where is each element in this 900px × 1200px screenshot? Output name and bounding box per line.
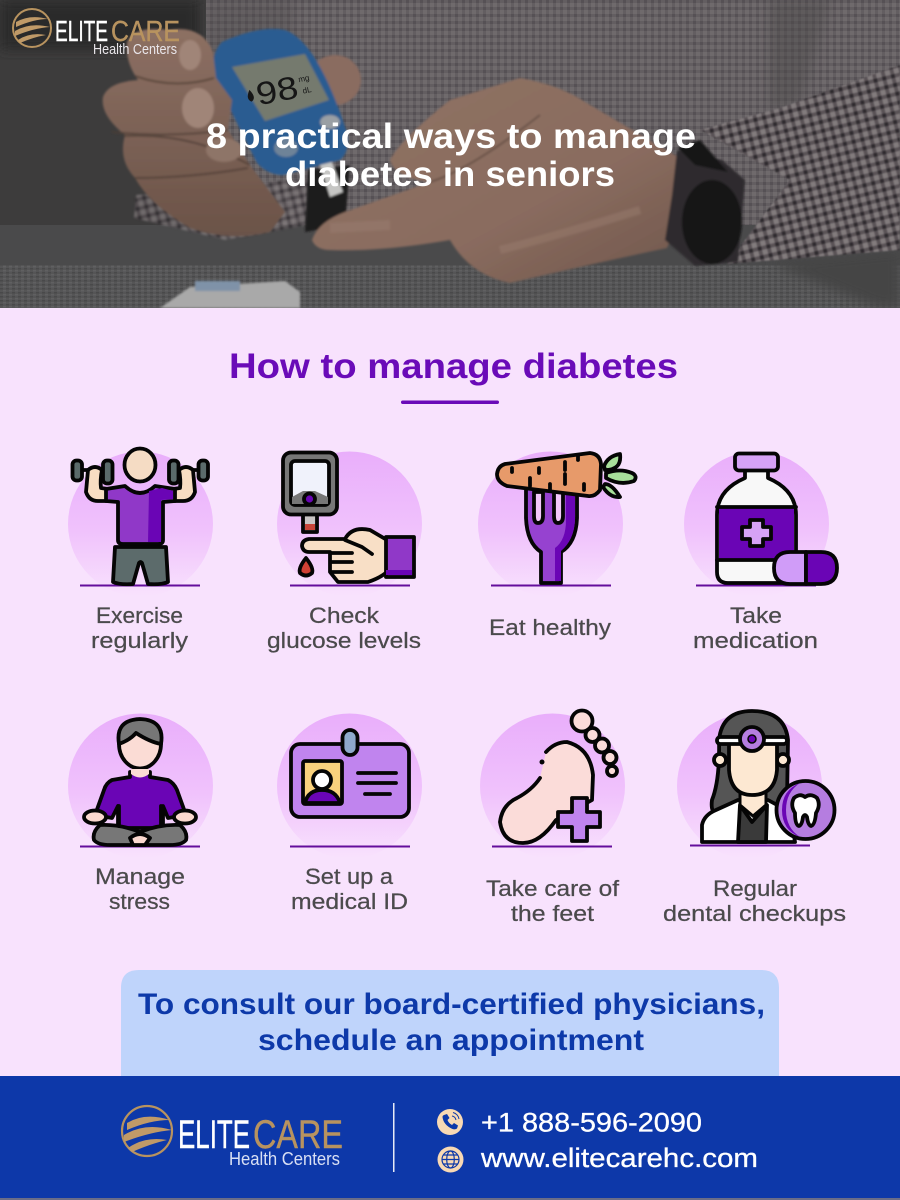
label bbox=[91, 603, 189, 653]
phone number: +1 888-596-2090 bbox=[481, 1108, 702, 1138]
label: Take care of bbox=[486, 876, 620, 901]
label: stress bbox=[109, 889, 170, 914]
top logo bbox=[13, 9, 180, 58]
label: Check bbox=[309, 603, 380, 628]
icon: glucose meter and pointing hand bbox=[283, 452, 414, 582]
smartwatch bbox=[665, 150, 745, 266]
label bbox=[486, 876, 620, 926]
top logo: Health Centers bbox=[93, 41, 177, 58]
back thumb bbox=[309, 55, 361, 105]
top logo: CARE bbox=[111, 16, 180, 48]
tip 1: exercise regularly bbox=[68, 448, 213, 653]
label: dental checkups bbox=[663, 901, 846, 926]
meter reading bbox=[248, 76, 312, 104]
footer logo: Health Centers bbox=[229, 1149, 340, 1169]
white pen on table bbox=[160, 281, 300, 308]
icon: medicine bottle and pill bbox=[717, 454, 837, 584]
label bbox=[693, 603, 818, 653]
title bbox=[206, 117, 696, 194]
icon: dentist with tooth badge bbox=[702, 711, 834, 842]
test strip bbox=[320, 162, 343, 197]
divider bbox=[393, 1103, 394, 1172]
top logo: ELITE bbox=[55, 16, 108, 48]
call to action box: To consult our board-certified physicians, bbox=[138, 988, 765, 1021]
left shirt cuff bbox=[134, 178, 310, 240]
meter reading: dL bbox=[302, 85, 313, 96]
tip 3: eat healthy bbox=[478, 452, 636, 640]
label bbox=[267, 603, 421, 653]
label bbox=[291, 864, 408, 914]
section heading: How to manage diabetes bbox=[229, 346, 678, 386]
icon: person meditating bbox=[84, 719, 196, 845]
meter reading: 98 bbox=[253, 69, 301, 112]
label: Set up a bbox=[305, 864, 393, 889]
label: medical ID bbox=[291, 889, 408, 914]
title: diabetes in seniors bbox=[285, 155, 615, 194]
glucose meter body bbox=[213, 29, 348, 175]
label: Manage bbox=[95, 864, 185, 889]
label: Take bbox=[730, 603, 782, 628]
label: regularly bbox=[91, 628, 189, 653]
label bbox=[95, 864, 185, 914]
dark device base bbox=[305, 165, 350, 232]
label: Exercise bbox=[96, 603, 183, 628]
website: www.elitecarehc.com bbox=[480, 1143, 758, 1173]
footer band bbox=[0, 1076, 900, 1200]
title: 8 practical ways to manage bbox=[206, 117, 696, 156]
meter reading: mg bbox=[298, 73, 310, 84]
hero photo: hands holding a glucose meter bbox=[0, 0, 900, 308]
tip 8: regular dental checkups bbox=[663, 711, 846, 926]
label: medication bbox=[693, 628, 818, 653]
tip 6: set up a medical ID bbox=[277, 714, 422, 914]
icon: foot with cross bbox=[500, 710, 617, 843]
label bbox=[663, 876, 846, 926]
label: the feet bbox=[511, 901, 595, 926]
tip 4: take medication bbox=[684, 452, 837, 653]
footer logo: ELITE bbox=[178, 1113, 250, 1157]
tip 7: take care of the feet bbox=[480, 710, 625, 926]
right hand bbox=[312, 78, 690, 283]
label: Eat healthy bbox=[489, 615, 612, 640]
call to action box bbox=[121, 970, 779, 1076]
icon: man lifting dumbbells bbox=[72, 448, 208, 584]
left fist bbox=[103, 29, 285, 236]
icon: medical ID card bbox=[291, 730, 409, 817]
footer logo bbox=[122, 1106, 343, 1169]
call to action box: schedule an appointment bbox=[258, 1024, 644, 1057]
shirt sleeve bbox=[700, 65, 900, 264]
tip 5: manage stress bbox=[68, 714, 213, 914]
label: glucose levels bbox=[267, 628, 421, 653]
footer logo: CARE bbox=[253, 1113, 343, 1157]
tip 2: check glucose levels bbox=[267, 452, 422, 653]
icon: globe bbox=[438, 1146, 464, 1172]
label: Regular bbox=[713, 876, 798, 901]
icon: carrot on a fork bbox=[497, 453, 636, 583]
icon: phone bbox=[437, 1109, 463, 1135]
section heading bbox=[229, 346, 678, 404]
